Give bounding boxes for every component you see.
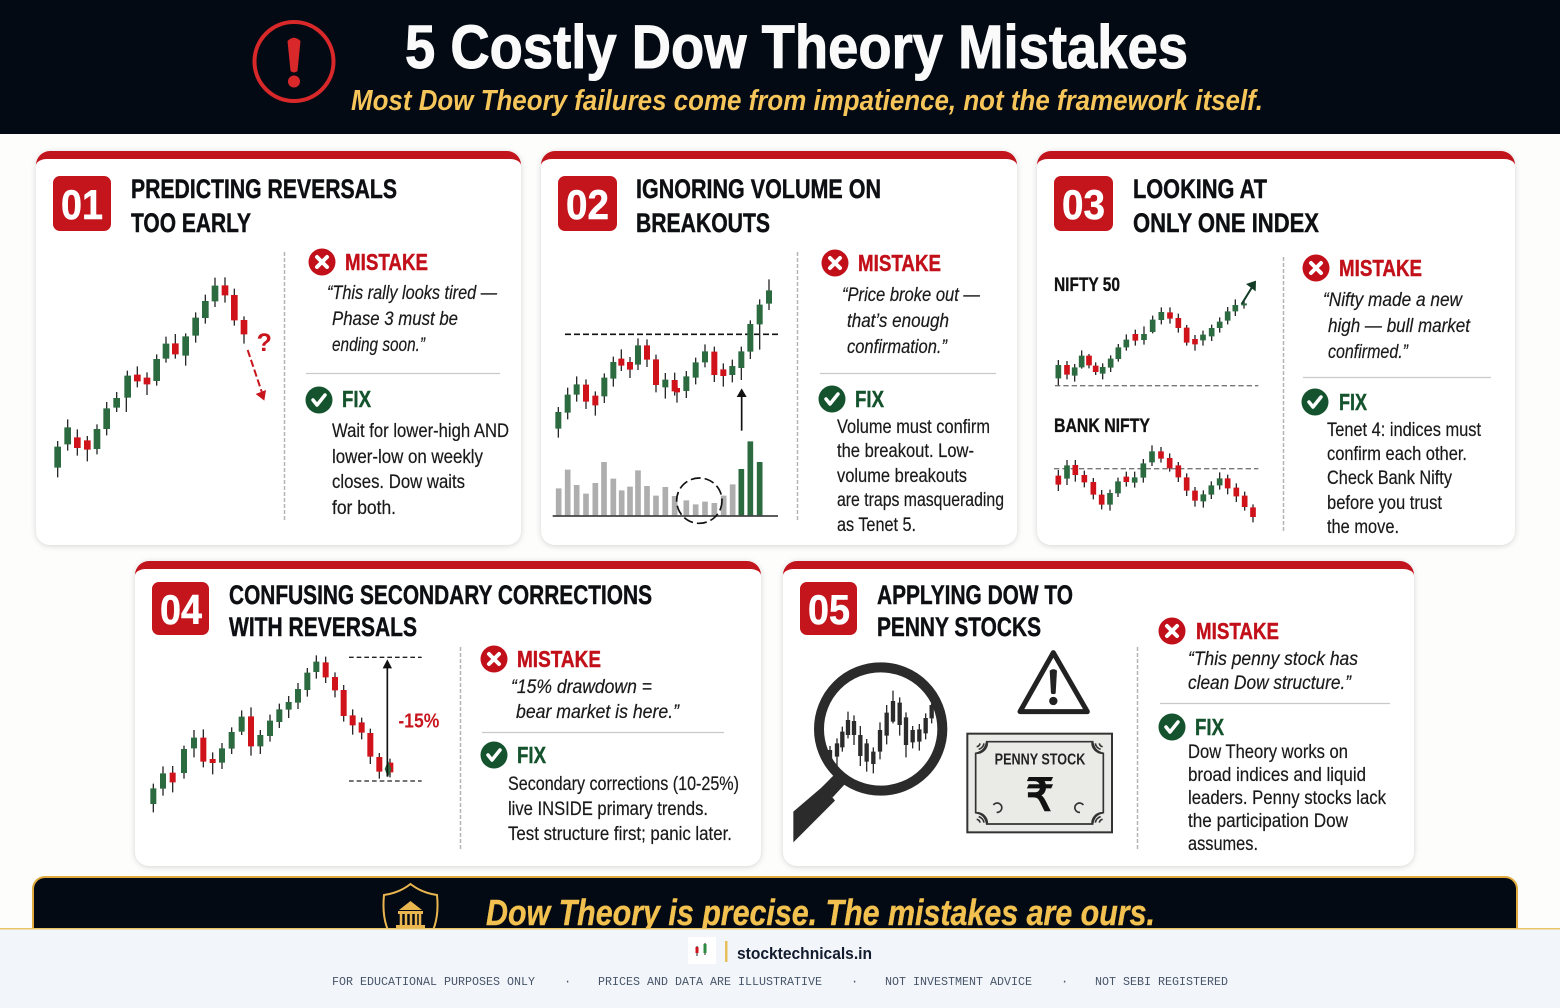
panel: mistake 03 [1037,151,1515,545]
icon: magnifying glass over candles [793,667,942,842]
mistake block: clean Dow structure.” [1188,673,1353,694]
fix block: the move. [1327,517,1399,538]
mistake block: ending soon.” [332,335,426,356]
panel: mistake 05 [783,561,1414,866]
heading [229,580,652,642]
fix block: as Tenet 5. [837,515,916,536]
mistake block: “15% drawdown = [511,677,652,698]
disclaimer: NOT INVESTMENT ADVICE [885,975,1032,989]
banner: closing message [33,877,1517,957]
disclaimer: FOR EDUCATIONAL PURPOSES ONLY [332,975,535,989]
badge 01 [53,176,111,231]
badge 02 [558,176,617,231]
fix block: confirm each other. [1327,444,1467,465]
mistake block: “Nifty made a new [1323,290,1463,311]
heading [636,174,881,238]
mistake block: MISTAKE [345,249,428,275]
fix block [1302,388,1482,538]
mistake block [480,646,681,723]
heading [877,580,1073,642]
fix block: lower-low on weekly [332,447,483,468]
icon: site logo [688,937,716,964]
mistake block [1302,254,1471,363]
heading: IGNORING VOLUME ON [636,174,881,204]
badge 03: 03 [1062,181,1105,228]
candlestick chart: Nifty 50 [1055,281,1258,386]
divider [1282,257,1284,532]
heading [131,174,397,238]
icon: penny stock banknote [967,734,1112,832]
icon: check mark [480,742,508,768]
icon: check mark [1302,388,1328,416]
fix block: FIX [342,386,372,412]
mistake block: “This rally looks tired — [327,283,498,304]
mistake block: confirmation.” [847,337,948,358]
panel: mistake 01 [36,151,521,545]
candlestick chart: secondary correction of 15% [153,655,439,812]
divider [284,252,286,522]
badge 05: 05 [808,586,850,633]
banner text: Dow Theory is precise. The mistakes are ours. [486,892,1155,933]
heading: LOOKING AT [1133,174,1267,204]
divider [460,647,462,851]
fix block: FIX [1339,389,1368,415]
mistake block: confirmed.” [1328,342,1409,363]
mistake block: “This penny stock has [1188,649,1358,670]
disclaimer: PRICES AND DATA ARE ILLUSTRATIVE [598,975,822,989]
mistake block: MISTAKE [1196,618,1279,644]
icon: check mark [306,386,332,414]
site name: stocktechnicals.in [737,944,872,963]
fix block: Tenet 4: indices must [1327,420,1482,441]
heading: APPLYING DOW TO [877,580,1073,610]
heading: TOO EARLY [131,208,251,238]
subtitle: Most Dow Theory failures come from impatience, not the framework itself. [351,85,1263,117]
disclaimer: · [564,975,571,989]
fix block: FIX [517,742,547,768]
fix block: volume breakouts [837,466,967,487]
heading: PENNY STOCKS [877,612,1041,642]
fix block: Wait for lower-high AND [332,421,509,442]
mistake block [822,250,981,358]
icon: shield with temple [383,884,438,942]
mistake block: Phase 3 must be [332,309,458,330]
mistake block: high — bull market [1328,316,1471,337]
fix block [818,386,1004,536]
icon: warning triangle [1020,653,1087,712]
heading [1133,174,1319,238]
header [0,0,1560,134]
fix block: Check Bank Nifty [1327,468,1452,489]
footer [0,928,1560,1008]
fix block: the breakout. Low- [837,441,974,462]
icon: x mark [480,646,508,672]
fix block: FIX [855,386,885,412]
mistake block: MISTAKE [1339,255,1422,281]
disclaimer: NOT SEBI REGISTERED [1095,975,1228,989]
mistake block [1158,618,1358,694]
fix block [1158,714,1386,855]
panel: mistake 04 [135,561,761,866]
disclaimer [332,975,1228,989]
mistake block: “Price broke out — [842,285,981,306]
arrow: measured drawdown [383,659,392,777]
fix block: leaders. Penny stocks lack [1188,788,1386,809]
fix block: Volume must confirm [837,417,990,438]
icon: alert [254,22,334,101]
volume bars [553,441,778,523]
badge 03 [1054,176,1113,231]
icon: x mark [1302,254,1330,282]
mistake block [308,248,498,356]
fix block: Test structure first; panic later. [508,824,732,845]
disclaimer: · [851,975,858,989]
divider [1136,647,1138,851]
label: -15%: -15% [398,709,439,732]
fix block: Secondary corrections (10-25%) [508,774,739,795]
heading: WITH REVERSALS [229,612,417,642]
fix block: closes. Dow waits [332,472,465,493]
arrow: upward trend [1242,281,1256,304]
fix block: FIX [1195,714,1225,740]
badge 01: 01 [61,181,103,228]
mistake block: that’s enough [847,311,949,332]
mistake block: MISTAKE [858,250,941,276]
icon: check mark [1158,714,1186,740]
candlestick and volume chart [553,279,778,523]
heading: BREAKOUTS [636,208,770,238]
fix block: live INSIDE primary trends. [508,799,708,820]
fix block: for both. [332,498,396,519]
icon: check mark [818,386,846,412]
badge 02: 02 [566,181,609,228]
icon: penny stock banknote: ₹ [1026,770,1054,821]
candlestick chart: Bank Nifty [1054,445,1258,522]
heading: CONFUSING SECONDARY CORRECTIONS [229,580,652,610]
title: 5 Costly Dow Theory Mistakes [405,13,1188,81]
panel: mistake 02 [541,151,1017,545]
icon: x mark [822,250,848,276]
fix block: the participation Dow [1188,811,1348,832]
fix block: assumes. [1188,834,1258,855]
fix block: before you trust [1327,493,1443,514]
heading: PREDICTING REVERSALS [131,174,397,204]
divider [796,252,798,522]
heading: ONLY ONE INDEX [1133,208,1319,238]
icon: x mark [1158,618,1186,644]
arrow: up to the breakout [737,388,747,431]
label: Nifty 50: NIFTY 50 [1054,275,1120,296]
fix block: are traps masquerading [837,490,1004,511]
label: Bank Nifty: BANK NIFTY [1054,416,1150,437]
disclaimer: · [1061,975,1068,989]
icon: x mark [308,248,336,276]
fix block: broad indices and liquid [1188,765,1366,786]
mistake block: MISTAKE [517,646,601,672]
badge 04: 04 [160,586,203,633]
icon: penny stock banknote: PENNY STOCK [995,751,1085,768]
mistake block: bear market is here.” [516,702,681,723]
candlestick chart: rally with a predicted reversal [58,277,272,477]
fix block [480,742,739,845]
candlestick chart: rally with a predicted reversal: ? [257,329,272,357]
fix block: Dow Theory works on [1188,742,1348,763]
fix block [306,386,509,519]
